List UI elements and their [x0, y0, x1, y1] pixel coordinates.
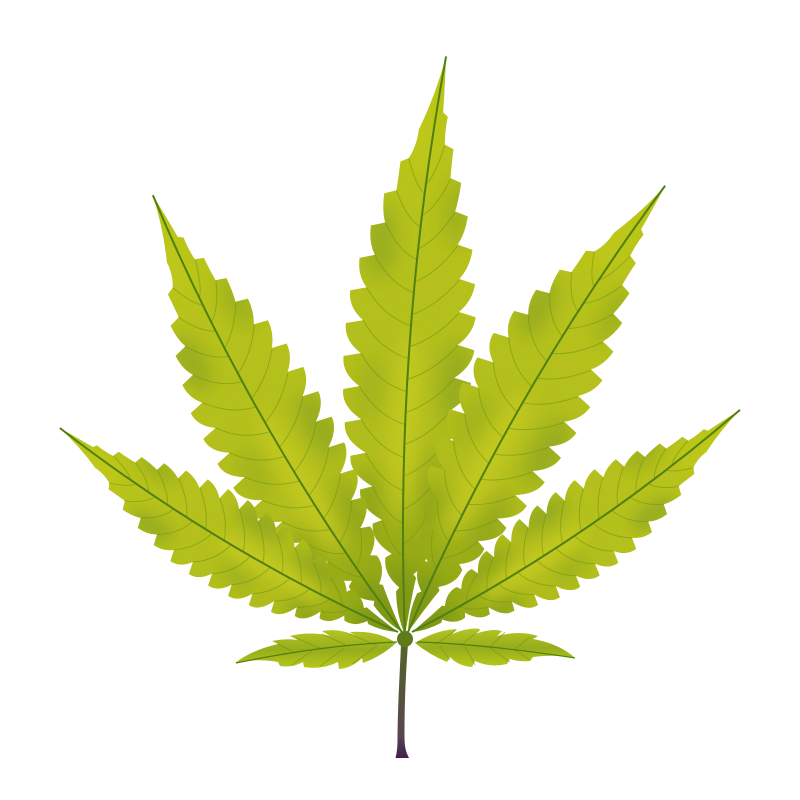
- small bottom left leaflet: [235, 630, 397, 669]
- lower left leaflet: [30, 398, 422, 685]
- leaf illustration: [59, 56, 741, 758]
- stem: [396, 644, 409, 758]
- leaf node: [397, 631, 413, 647]
- upper left leaflet: [86, 172, 447, 678]
- center leaflet: [323, 51, 495, 648]
- small bottom right leaflet: [415, 629, 575, 667]
- lower right leaflet: [387, 381, 773, 684]
- upper right leaflet: [337, 147, 705, 663]
